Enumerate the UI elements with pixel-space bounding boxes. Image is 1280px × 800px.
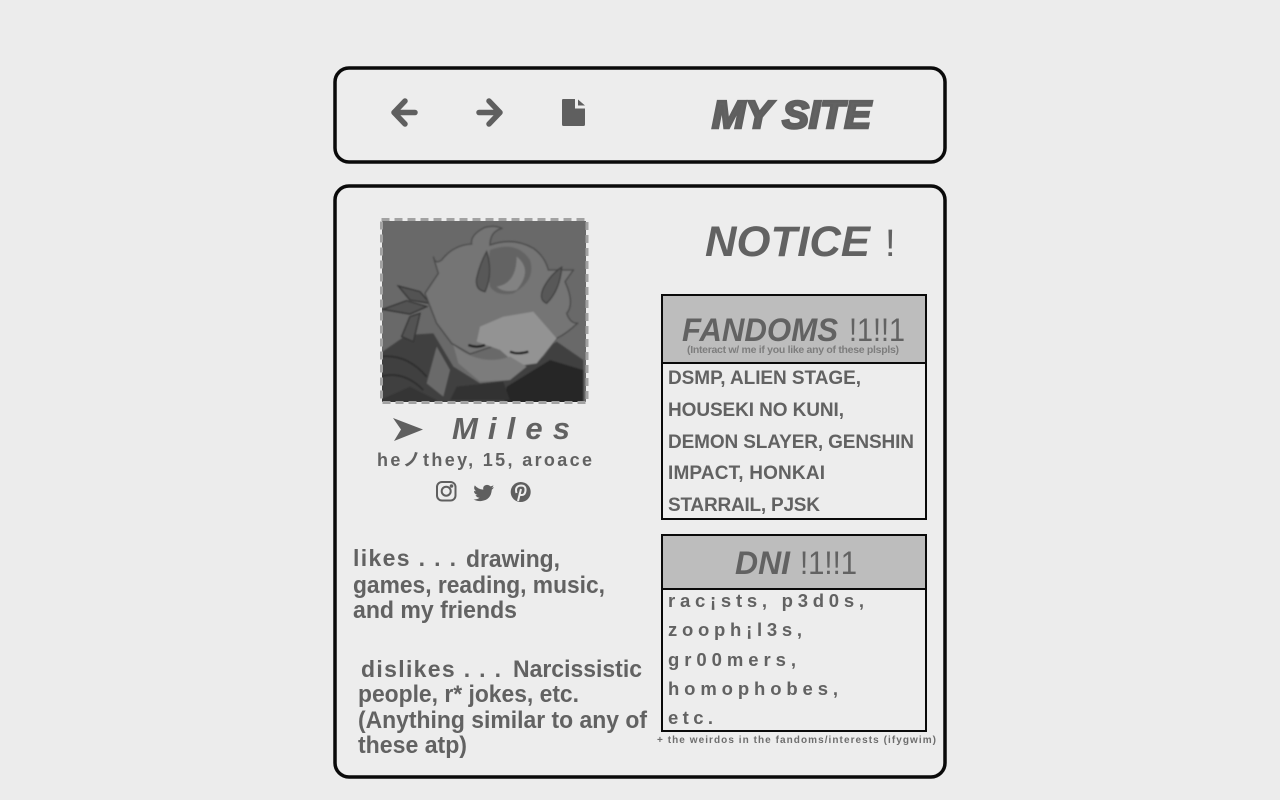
notice heading: ! [885,223,896,265]
fandoms header: !1!!1 [849,312,905,348]
panel: top navigation bar [335,68,945,162]
fandoms header: (Interact w/ me if you like any of these plspls) [687,344,899,356]
social icons [437,482,531,502]
pronouns and age: heノthey, 15, aroace [377,450,592,470]
footnote: + the weirdos in the fandoms/interests (ifygwim) [657,735,936,746]
likes text: and my friends [353,597,517,624]
fandoms header: FANDOMS [682,312,839,348]
likes text: drawing, [466,546,560,573]
avatar image [380,220,587,423]
dislikes text: people, r* jokes, etc. [358,681,579,708]
dni header [662,535,926,589]
dislikes text: these atp) [358,732,467,759]
dni list: rac¡sts, p3d0s, [668,590,864,611]
icon: document [562,99,585,126]
avatar leaves [383,286,430,342]
dni header: DNI [735,545,791,581]
dni list: gr00mers, [668,649,796,670]
fandoms header [662,295,926,363]
likes text [353,545,605,624]
icon: instagram [437,482,456,500]
panel: do not interact [662,535,926,731]
notice heading: NOTICE [705,218,871,266]
fandoms list [668,368,914,516]
fandoms list: IMPACT, HONKAI [668,463,825,484]
fandoms list: HOUSEKI NO KUNI, [668,400,844,421]
icon: pointer arrow [393,418,423,441]
fandoms list: DEMON SLAYER, GENSHIN [668,432,914,453]
panel: fandoms [662,295,926,519]
fandoms list: DSMP, ALIEN STAGE, [668,368,861,389]
dni list: etc. [668,707,713,728]
dni list: homophobes, [668,678,838,699]
avatar hair [425,226,577,367]
avatar horns [476,252,562,303]
icon: back arrow [394,101,415,124]
icon: twitter [474,485,494,501]
panel: main profile card [335,186,945,777]
avatar body [382,333,584,402]
dislikes text: dislikes . . . [361,656,501,682]
dislikes text [358,656,648,759]
fandoms list: STARRAIL, PJSK [668,495,820,516]
dislikes text: (Anything similar to any of [358,707,648,734]
icon: pinterest [511,482,531,502]
site title: MY SITE [712,94,872,137]
icon: forward arrow [479,101,500,124]
likes text: games, reading, music, [353,572,605,599]
likes text: likes . . . [353,545,456,571]
dislikes text: Narcissistic [513,656,642,683]
dni list: zooph¡l3s, [668,619,802,640]
name: Miles [452,411,570,446]
dni list [668,590,864,728]
dni header: !1!!1 [800,545,857,581]
